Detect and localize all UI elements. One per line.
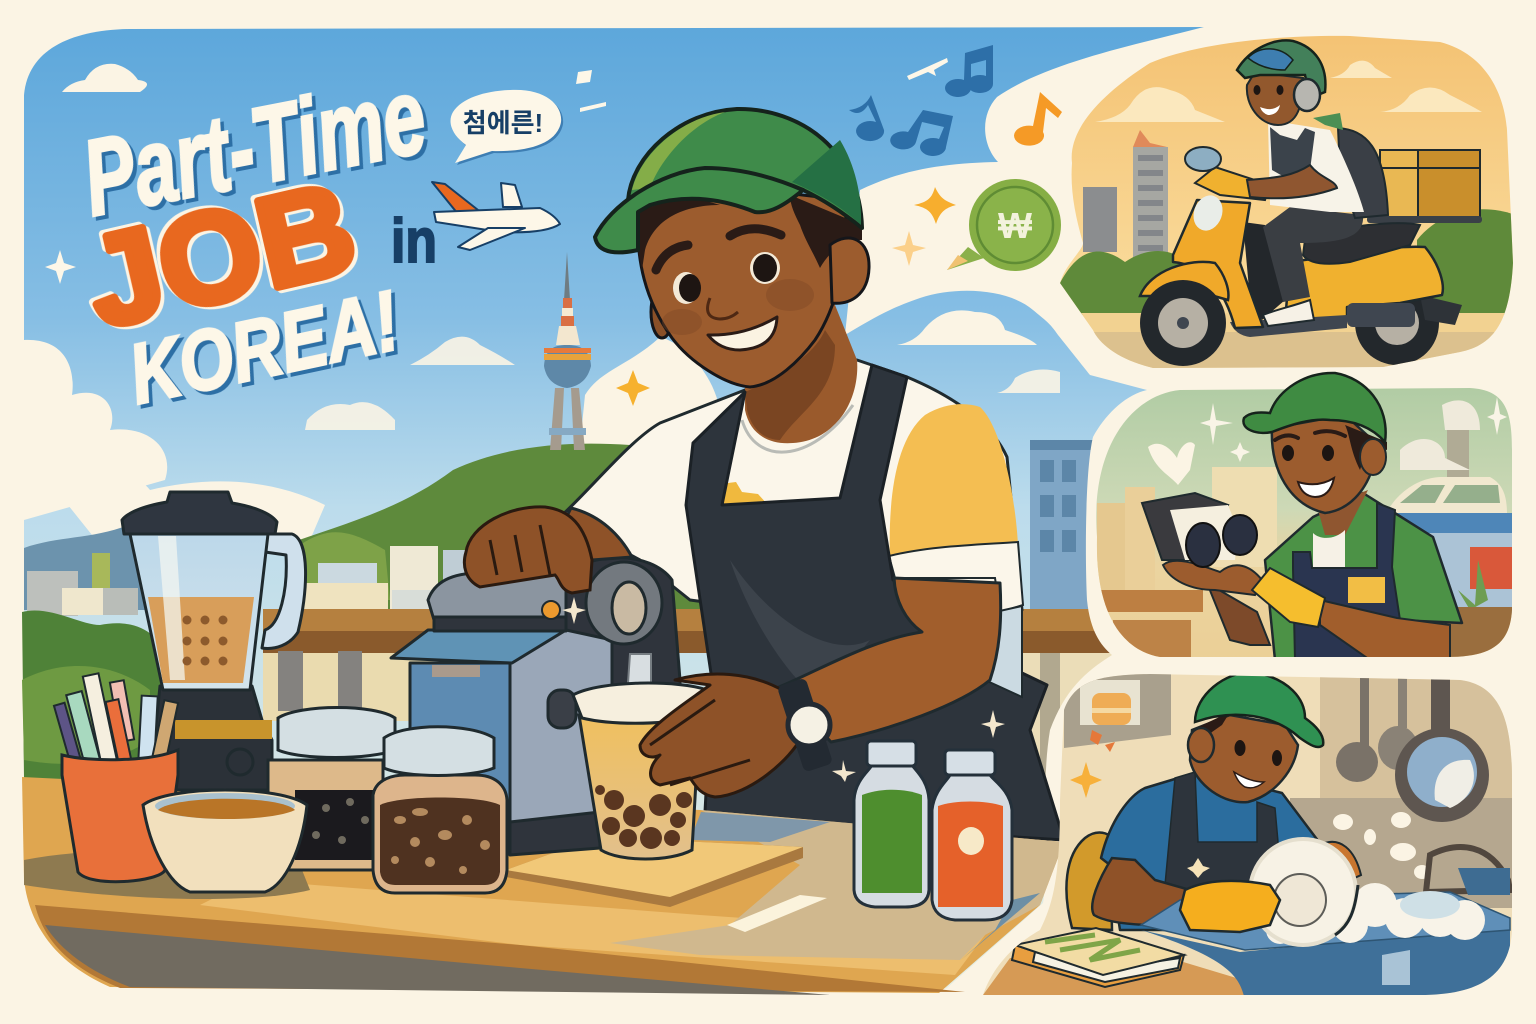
- music notes: [849, 45, 993, 156]
- fuselage: [434, 208, 560, 232]
- coffee boba: [380, 798, 500, 885]
- beige area: [610, 810, 1064, 960]
- straw cup: [54, 673, 178, 882]
- roller part: [1142, 493, 1257, 567]
- drain: [1382, 950, 1410, 985]
- lighter hill: [300, 532, 390, 600]
- counter edge: [35, 905, 965, 992]
- handle: [262, 534, 306, 648]
- spout: [627, 654, 651, 697]
- eyes: [1234, 740, 1282, 766]
- panel 2 sparkles: [1200, 397, 1507, 462]
- face: [1272, 415, 1378, 513]
- clouds: [1095, 61, 1482, 122]
- right hair: [790, 195, 862, 268]
- Seoul tower: [544, 252, 591, 450]
- smoke stack: [1447, 430, 1469, 477]
- machine shadow: [690, 812, 830, 842]
- top wing: [501, 183, 522, 207]
- backpack: [1338, 128, 1388, 218]
- table: [980, 955, 1245, 1000]
- rider smile: [1260, 105, 1280, 115]
- rider eyes: [1254, 85, 1284, 95]
- machine top: [428, 573, 566, 620]
- distant blue mountain: [24, 520, 190, 610]
- panel 2 head: [1243, 373, 1387, 513]
- stars on cream: [892, 187, 956, 266]
- gold band: [175, 720, 272, 739]
- green liquid: [862, 790, 922, 893]
- handlebar: [1195, 167, 1270, 200]
- orange bottle: [932, 750, 1012, 920]
- rear body: [1285, 247, 1443, 322]
- green mountain: [285, 444, 760, 620]
- tail fin: [432, 182, 478, 214]
- hair: [1192, 712, 1230, 740]
- left trees: [22, 611, 165, 785]
- right arm: [779, 578, 1001, 742]
- bandana: [1313, 113, 1343, 130]
- chest yellow print: [720, 482, 768, 505]
- leaf mark: [1148, 442, 1195, 485]
- title: [73, 54, 437, 422]
- straws: [54, 673, 178, 765]
- smoke cloud: [1400, 400, 1480, 470]
- rear wheel: [1355, 300, 1439, 365]
- orange knob: [542, 601, 560, 619]
- lens: [612, 582, 646, 634]
- dots: [182, 616, 228, 666]
- ear: [830, 238, 869, 303]
- foam: [1266, 883, 1485, 944]
- city buildings left: [27, 546, 465, 616]
- floorboard: [1230, 315, 1347, 337]
- nose: [708, 298, 738, 319]
- rear fender: [1422, 298, 1462, 325]
- front fender: [1140, 262, 1228, 300]
- shoe: [1263, 300, 1314, 326]
- airplane: [432, 182, 560, 250]
- blue front: [410, 663, 510, 835]
- panel: delivery scooter: [1050, 30, 1520, 375]
- sky panel: [24, 27, 1210, 990]
- vest: [1270, 127, 1315, 176]
- scooter shield: [1173, 200, 1263, 328]
- blender: [122, 492, 306, 790]
- sink rim: [1141, 892, 1510, 950]
- sparkles: [45, 58, 948, 284]
- neck: [1318, 490, 1368, 535]
- dial: [227, 749, 253, 775]
- cap: [1243, 373, 1386, 442]
- front wheel: [1140, 280, 1226, 366]
- panel: dishwashing: [980, 665, 1520, 1000]
- cup: [62, 750, 178, 882]
- liquid: [148, 597, 254, 683]
- jar lid: [278, 708, 395, 758]
- head: [1190, 715, 1298, 802]
- counter top: [22, 777, 1064, 993]
- sink front: [1141, 925, 1510, 1000]
- blender base: [155, 686, 272, 790]
- window shelf: [1064, 673, 1171, 748]
- panel: machine repair background and body: [1085, 380, 1520, 665]
- brown boba jar: [373, 727, 507, 893]
- KOREA!: KOREA!: [121, 273, 407, 422]
- blue roof: [391, 630, 566, 663]
- orange liquid: [938, 802, 1003, 907]
- cream separator around side panels: [845, 0, 1536, 1024]
- shirt: [1265, 493, 1462, 660]
- ear: [1360, 439, 1386, 475]
- highlight stripe: [727, 895, 827, 932]
- ladle two: [1378, 678, 1418, 770]
- lighter wood strip: [200, 880, 985, 975]
- city building right: [1030, 440, 1100, 615]
- road: [1094, 332, 1494, 368]
- arm: [1092, 858, 1190, 925]
- goggles: [1248, 49, 1293, 70]
- JOB: JOB: [74, 156, 367, 355]
- cylinder housing: [566, 558, 680, 700]
- in: in: [391, 207, 437, 276]
- Part-Time: Part-Time: [73, 54, 435, 239]
- note pair top: [945, 45, 993, 97]
- ear: [1188, 728, 1214, 762]
- cap: [1195, 672, 1323, 747]
- clouds: [24, 64, 1060, 545]
- cap shade: [792, 140, 861, 225]
- rack: [1426, 847, 1510, 892]
- chair: [1066, 832, 1112, 930]
- hanging pan: [1395, 678, 1489, 822]
- foam shade: [1400, 891, 1460, 919]
- won coin: ₩: [998, 205, 1032, 246]
- lower wing: [458, 228, 525, 250]
- yellow sleeve: [890, 404, 1018, 560]
- wooden railing: [263, 609, 1123, 835]
- orange star: [616, 370, 650, 406]
- orange note: [1014, 92, 1062, 146]
- soap bubbles: [1333, 812, 1430, 879]
- eyes: [673, 252, 780, 304]
- note pair low: [890, 110, 953, 156]
- smile: [1234, 772, 1264, 788]
- cup body: [579, 712, 700, 859]
- apron fold shading: [730, 560, 870, 700]
- grey building: [1083, 187, 1117, 252]
- jar body: [268, 760, 383, 870]
- glass highlight: [158, 536, 185, 680]
- jar body: [373, 775, 507, 893]
- cargo box: [1380, 150, 1480, 218]
- blue bottle shadow: [961, 893, 1040, 960]
- platform: [1367, 216, 1482, 223]
- apron: [1165, 772, 1285, 900]
- ladle one: [1336, 678, 1378, 782]
- ground: [1050, 313, 1520, 335]
- brows: [656, 229, 781, 270]
- green bottle: [854, 741, 929, 907]
- wall: [1320, 675, 1520, 805]
- leaves: [1090, 730, 1115, 752]
- apron star: [1187, 858, 1210, 878]
- torso: [1268, 120, 1364, 212]
- mirror: [1185, 147, 1221, 171]
- label dot: [958, 827, 984, 855]
- inner leg shield: [1243, 222, 1285, 320]
- cake: [1092, 693, 1131, 725]
- grey side: [510, 630, 612, 840]
- hand on cup: [640, 674, 803, 797]
- speech bubble: 첨에른!: [463, 108, 543, 138]
- legs: [1263, 207, 1363, 302]
- speech bubble: [451, 90, 561, 163]
- torso: [1101, 772, 1319, 930]
- headlight: [1194, 195, 1222, 231]
- side knob: [548, 690, 576, 728]
- forearm: [1320, 600, 1450, 660]
- left forearm: [560, 508, 632, 560]
- car windows: [1400, 485, 1500, 503]
- hair: [1345, 425, 1387, 470]
- lid: [573, 683, 707, 723]
- machine base: [510, 812, 600, 855]
- far ear: [651, 286, 673, 338]
- machine: [391, 558, 680, 855]
- upper arm: [1207, 583, 1270, 645]
- cap: [945, 750, 995, 775]
- yellow glove: [1252, 568, 1325, 627]
- cheeks: [662, 279, 814, 335]
- desk: [1100, 590, 1203, 612]
- shadow under left items: [24, 851, 310, 899]
- book: [1012, 928, 1184, 987]
- car: [1388, 477, 1507, 515]
- lid: [122, 492, 277, 534]
- collar line: [742, 405, 853, 452]
- exhaust: [1347, 303, 1415, 327]
- jar lid: [384, 727, 494, 776]
- rider face: [1247, 72, 1303, 125]
- hand on machine: [464, 507, 592, 593]
- watch: [777, 678, 833, 772]
- bottle body: [854, 765, 929, 907]
- tower: [1133, 130, 1168, 262]
- glass jar: [130, 534, 268, 690]
- machine label: [432, 665, 480, 677]
- forehead hair: [638, 196, 720, 270]
- orange crate: [1470, 547, 1515, 589]
- brows: [1275, 431, 1345, 440]
- cap dome: [628, 109, 862, 228]
- black boba: [295, 790, 383, 860]
- apron: [686, 365, 1064, 840]
- boba: [595, 785, 692, 849]
- cutting board: [506, 837, 803, 907]
- smile: [1298, 478, 1334, 497]
- arm: [1247, 165, 1337, 198]
- neck: [745, 300, 857, 443]
- under shadow: [45, 925, 830, 995]
- plant: [1458, 560, 1488, 610]
- hand: [1163, 561, 1262, 595]
- seat: [1303, 223, 1420, 264]
- tan buildings: [1097, 467, 1277, 597]
- yellow glove: [1180, 881, 1280, 932]
- right hand: [1320, 842, 1361, 880]
- cap highlight: [632, 112, 725, 190]
- trees: [1060, 209, 1515, 315]
- headphone: [1294, 79, 1320, 111]
- shirt torso: [560, 360, 1022, 640]
- cap: [867, 741, 916, 766]
- head: [595, 109, 869, 387]
- won coin: [947, 179, 1061, 271]
- eyes: [1282, 445, 1334, 461]
- shirt tail: [985, 606, 1022, 697]
- counter: [22, 777, 1064, 995]
- cream bowl: [143, 790, 307, 892]
- helmet: [1237, 40, 1325, 98]
- blue band: [1388, 513, 1518, 533]
- plate: [1250, 839, 1358, 945]
- bubble tea cup: [573, 683, 707, 859]
- badge: [1348, 577, 1385, 603]
- panel 3 sparkle: [1070, 762, 1102, 798]
- apron sparkles: [562, 597, 1005, 782]
- bottle body: [932, 775, 1012, 920]
- black boba jar: [268, 708, 395, 870]
- cap brim: [595, 168, 803, 252]
- disk: [586, 562, 662, 644]
- ground: [1445, 607, 1515, 662]
- single note: [849, 95, 884, 141]
- smile: [708, 317, 777, 350]
- apron: [1293, 503, 1400, 660]
- white sleeve cuff: [889, 542, 1023, 612]
- face: [638, 190, 846, 387]
- white tee: [1313, 530, 1345, 567]
